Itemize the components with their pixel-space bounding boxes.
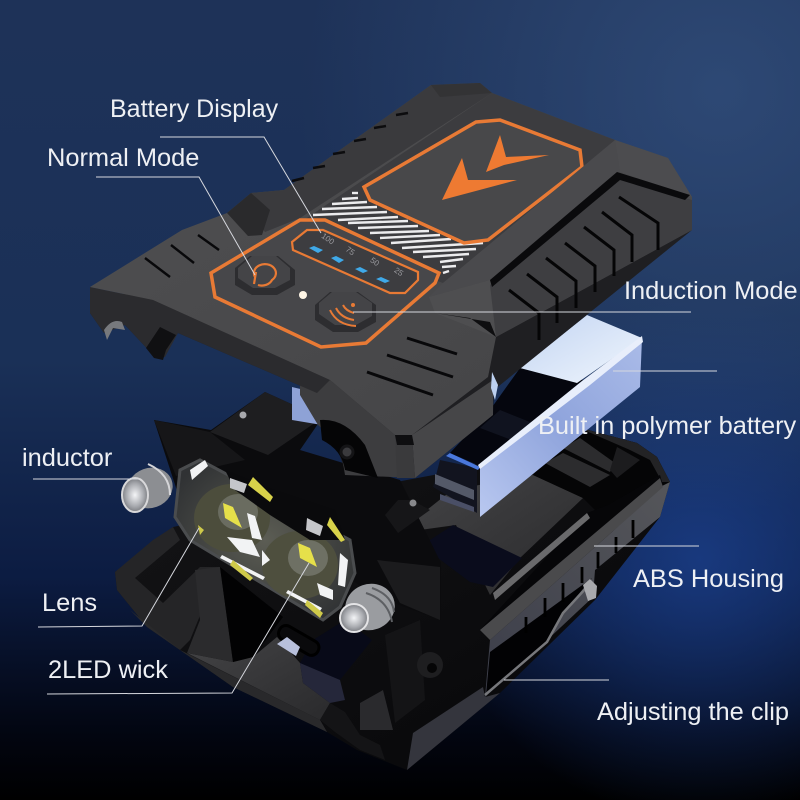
oval slot <box>276 623 322 658</box>
label: Induction Mode: Induction Mode <box>624 277 798 305</box>
label: Battery Display <box>110 95 321 233</box>
interior slats <box>533 427 670 520</box>
lens assembly <box>175 460 355 620</box>
rim slits <box>526 520 633 633</box>
inner posts <box>385 620 425 723</box>
rear plate behind lenses <box>154 392 441 620</box>
battery percent labels: 50 <box>368 256 381 268</box>
right block <box>429 140 692 337</box>
panel: top cover <box>90 83 692 478</box>
left inner wall <box>187 567 233 662</box>
battery percent labels: 75 <box>344 245 357 258</box>
stripes <box>313 193 483 273</box>
indicator dot <box>299 291 307 299</box>
label: 2LED wick: 2LED wick <box>48 656 168 684</box>
small blue piece under lid <box>292 387 322 425</box>
right vents <box>509 197 658 340</box>
lid underside shadow <box>90 230 692 478</box>
panel: control plate <box>211 220 439 347</box>
dark navy recess <box>430 525 522 587</box>
label: Lens <box>38 528 199 627</box>
housing floor right <box>398 475 583 595</box>
label: ABS Housing: ABS Housing <box>633 565 784 593</box>
housing left rim <box>115 527 327 732</box>
lens body <box>175 460 355 620</box>
label: Battery Display: Battery Display <box>110 95 279 123</box>
panel: logo plate <box>364 120 582 243</box>
battery dark opening <box>450 368 583 466</box>
lid left face with tabs <box>90 287 330 393</box>
label: Built in polymer battery: Built in polymer battery <box>538 412 797 440</box>
black notch <box>490 172 690 287</box>
inner corner curve <box>320 703 385 760</box>
lower housing <box>115 427 670 770</box>
icon: induction button <box>315 292 376 332</box>
adjusting clip <box>485 579 597 695</box>
right rim wall <box>485 482 670 697</box>
front vents <box>367 338 457 395</box>
lens circles <box>194 484 270 552</box>
battery percent labels: 100 <box>320 231 336 247</box>
vent face <box>490 180 692 337</box>
battery display <box>292 230 418 293</box>
lid front face <box>300 370 415 478</box>
navy block <box>300 620 372 693</box>
back leds <box>248 477 273 502</box>
label: inductor <box>22 444 138 479</box>
center black block <box>220 567 283 662</box>
label: Lens: Lens <box>42 589 97 617</box>
led diamond right <box>298 543 317 567</box>
panel: polymer battery <box>292 315 643 517</box>
black upper gap <box>225 470 345 540</box>
icon: power button <box>235 256 295 295</box>
right rim black channel <box>480 475 662 630</box>
inset dark top band <box>292 93 615 283</box>
led diamond left <box>223 503 242 528</box>
label: Normal Mode: Normal Mode <box>47 144 199 172</box>
left vents <box>145 235 219 277</box>
battery top <box>520 315 642 383</box>
icon: chevron right <box>486 135 549 172</box>
housing front floor <box>187 637 330 720</box>
lower right outer wall <box>407 687 500 770</box>
glass highlights <box>190 460 348 611</box>
arch cutout <box>320 420 378 478</box>
icon: right small lens <box>339 577 401 637</box>
icon: left small lens <box>122 461 178 515</box>
clip slot <box>486 578 592 695</box>
front outer band <box>130 610 327 732</box>
battery percent labels: 25 <box>392 266 405 278</box>
label: 2LED wick <box>47 563 309 694</box>
label: inductor: inductor <box>22 444 113 472</box>
label: Normal Mode <box>47 144 255 275</box>
housing shell <box>115 427 670 770</box>
glint <box>491 372 498 400</box>
lid top surface <box>90 83 692 435</box>
battery leds <box>309 246 390 283</box>
icon: chevron left <box>442 158 517 200</box>
battery percent labels <box>320 231 405 278</box>
battery end <box>433 460 477 513</box>
label: Adjusting the clip: Adjusting the clip <box>597 698 789 726</box>
left ridge <box>245 83 492 232</box>
battery side <box>480 338 642 517</box>
top ticks <box>292 113 408 181</box>
